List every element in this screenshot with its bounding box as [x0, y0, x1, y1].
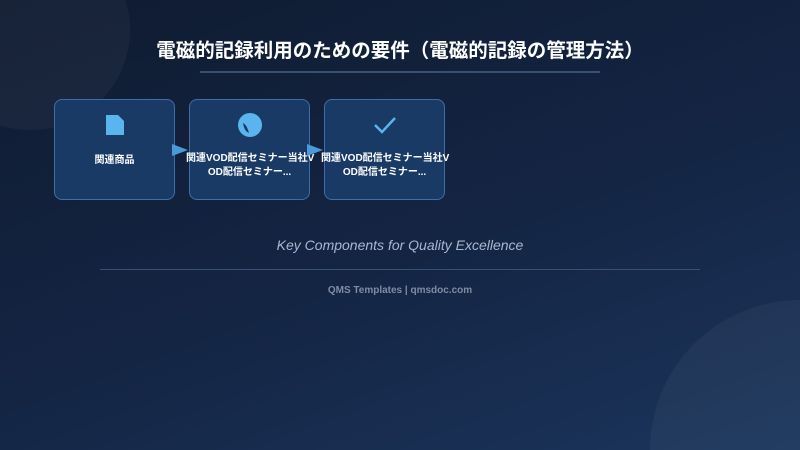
card 2 text: [186, 152, 314, 178]
icon: circle: [238, 113, 262, 137]
arrow 2: [307, 144, 323, 156]
card 3 text: OD配信セミナー...: [343, 167, 426, 178]
card 1 text: 関連商品: [94, 155, 134, 166]
footer: QMS Templates | qmsdoc.com: [328, 285, 472, 296]
card 3 text: 関連VOD配信セミナー当社V: [321, 153, 449, 164]
card 2 text: OD配信セミナー...: [208, 167, 291, 178]
card 3 text: [321, 152, 450, 178]
card 3: [324, 99, 445, 200]
subtitle: Key Components for Quality Excellence: [277, 237, 523, 253]
card 2 text: 関連VOD配信セミナー当社V: [186, 153, 314, 164]
card 1: [54, 99, 175, 200]
icon: document: [106, 115, 124, 135]
arrow 1: [172, 144, 188, 156]
title: 電磁的記録利用のための要件（電磁的記録の管理方法）: [156, 40, 644, 62]
icon: check: [374, 117, 396, 134]
card 2: [189, 99, 310, 200]
